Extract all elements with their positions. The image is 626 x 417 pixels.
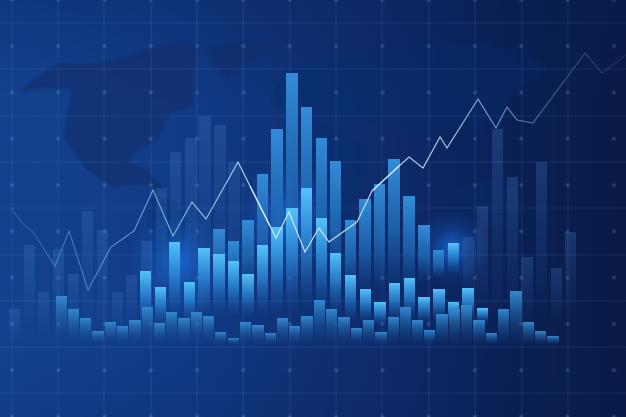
- map: North America: [18, 42, 197, 193]
- trend line highlights: [250, 165, 400, 226]
- map: Europe and Asia: [270, 42, 548, 136]
- map: Greenland: [207, 41, 273, 80]
- bars: bright cyan layer: [140, 188, 488, 326]
- map: South America: [148, 198, 190, 280]
- map: Australia: [455, 178, 522, 228]
- bars: short front layer: [56, 291, 559, 345]
- bars: faint background layer: [9, 116, 576, 340]
- map: Africa: [276, 124, 372, 232]
- bars: tall blue layer: [213, 73, 444, 296]
- trend line: [11, 53, 626, 290]
- world map silhouette: [18, 41, 548, 280]
- glow spots: [130, 156, 490, 317]
